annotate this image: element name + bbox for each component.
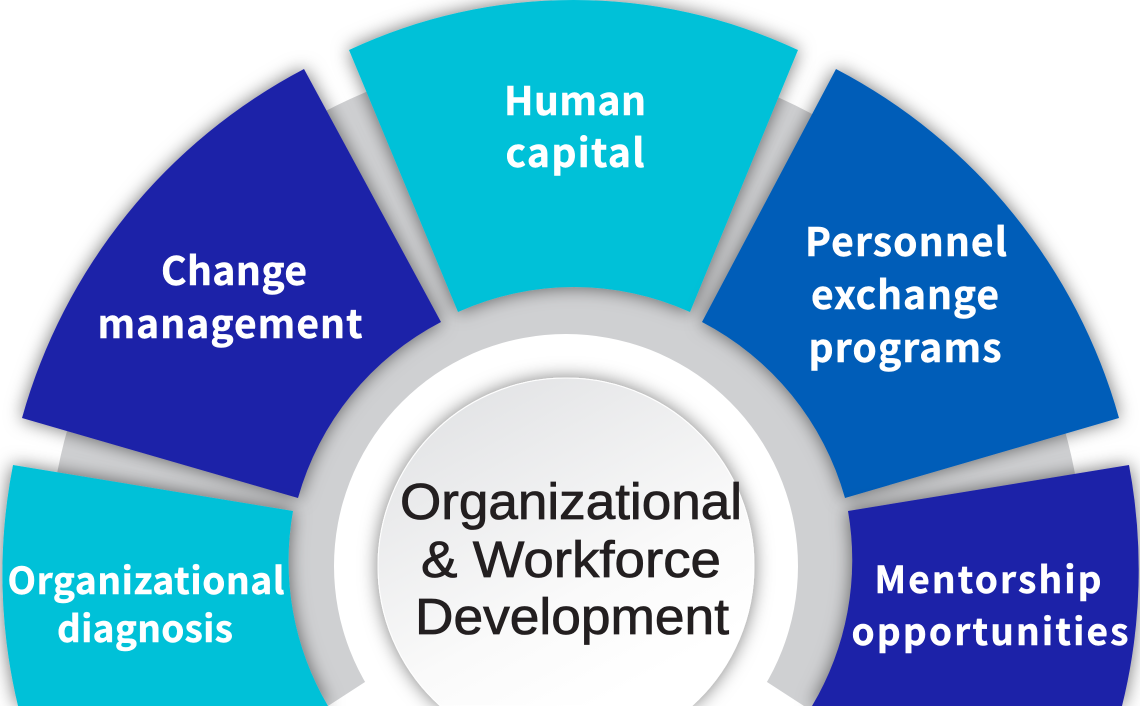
center title: & Workforce [421,531,721,588]
panel: personnel exchange programs [702,69,1119,498]
label: change management: management [98,294,362,350]
label: change management: Change [161,241,307,297]
center title: Organizational [400,473,742,530]
panel: mentorship opportunities [812,465,1139,706]
panel: organizational diagnosis [2,465,328,706]
panel: change management [22,69,441,498]
panel: human capital [349,0,798,312]
label: mentorship opportunities: opportunities [852,602,1128,656]
label: organizational diagnosis: Organizational [8,551,284,605]
label: mentorship opportunities: Mentorship [874,550,1102,604]
label: organizational diagnosis: diagnosis [57,599,233,653]
label: human capital: Human [504,71,646,127]
label: personnel exchange programs: programs [808,318,1002,374]
label: personnel exchange programs: Personnel [805,212,1007,268]
label: human capital: capital [506,123,644,179]
label: personnel exchange programs: exchange [811,265,999,321]
center disc [378,378,754,706]
white inner ring [334,334,798,706]
center title: Development [415,588,729,645]
